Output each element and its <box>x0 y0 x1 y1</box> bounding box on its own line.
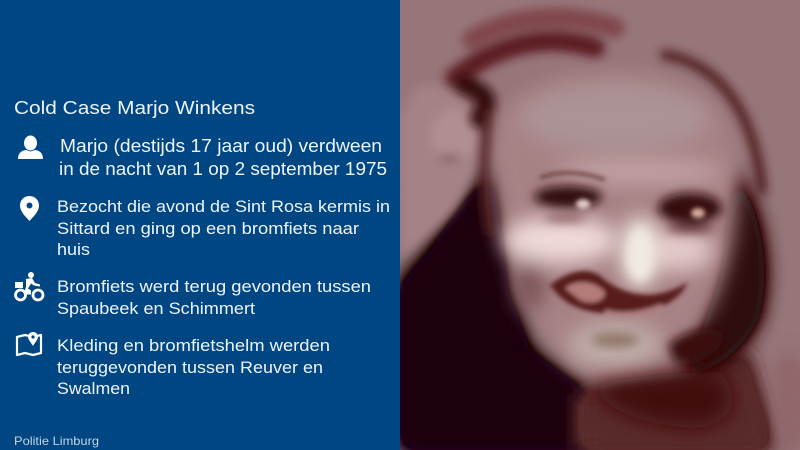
text: kermis visit: huis <box>57 240 90 259</box>
text: moped found <box>57 277 371 318</box>
text: clothing found: teruggevonden tussen Reuver en <box>57 358 323 377</box>
nose highlight <box>620 216 660 288</box>
panel: blue text panel <box>0 0 400 450</box>
face <box>493 72 737 378</box>
text: disappearance <box>59 136 387 179</box>
hair top strands <box>455 18 762 230</box>
text: moped found: Spaubeek en Schimmert <box>57 299 255 318</box>
photo: portrait, blurred approximation <box>400 0 800 450</box>
title: Cold Case Marjo Winkens <box>14 97 255 118</box>
hair lock by jaw <box>668 330 725 364</box>
forehead and skin highlights <box>502 84 725 369</box>
text: clothing found: Swalmen <box>57 379 130 398</box>
source credit: Politie Limburg <box>14 434 99 448</box>
text: kermis visit: Bezocht die avond de Sint Rosa kermis in <box>57 197 390 216</box>
chin shadow <box>591 333 639 347</box>
dark hair at lower left <box>400 175 610 450</box>
lower right shoulder tone <box>780 350 800 450</box>
text: disappearance: Marjo (destijds 17 jaar oud) verdween <box>60 136 382 156</box>
icon: location pin <box>20 196 39 221</box>
hair below face <box>580 350 775 450</box>
text: kermis visit <box>57 197 390 259</box>
text: clothing found <box>57 336 330 398</box>
icon: moped rider <box>15 272 43 300</box>
text: kermis visit: Sittard en ging op een bromfiets naar <box>57 219 359 238</box>
hand <box>400 85 483 258</box>
text: disappearance: in de nacht van 1 op 2 september 1975 <box>59 159 387 179</box>
mouth <box>550 271 688 314</box>
hair on right side <box>685 170 764 378</box>
neck shadow <box>590 372 732 428</box>
icon: person <box>18 136 43 159</box>
photo background <box>400 0 800 450</box>
text: moped found: Bromfiets werd terug gevonden tussen <box>57 277 371 296</box>
nose core <box>628 229 652 281</box>
text: clothing found: Kleding en bromfietshelm werden <box>57 336 330 355</box>
eyes <box>534 186 722 233</box>
icon: map with pin <box>17 332 41 355</box>
